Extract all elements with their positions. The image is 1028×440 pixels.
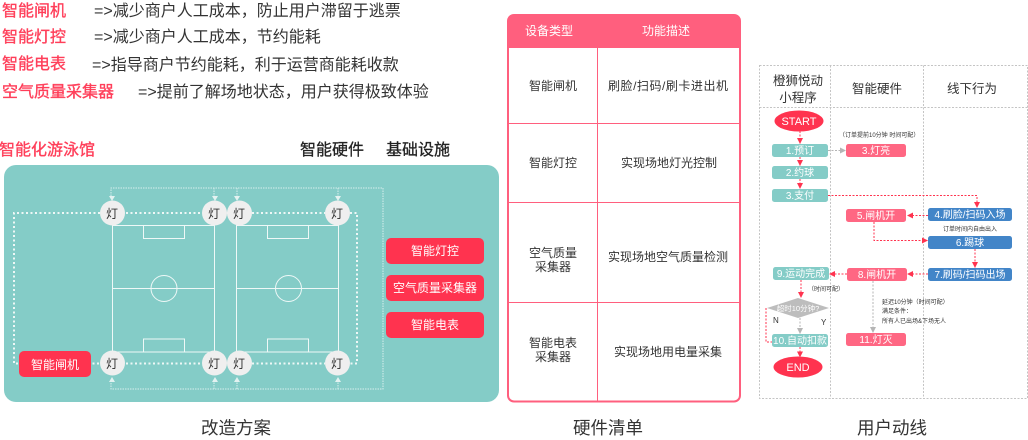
row: smart meter collector: 智能电表 [529, 335, 577, 350]
heading: smart swimming hall: 智能化游泳馆 [0, 141, 95, 159]
light top 3 [227, 200, 252, 226]
button: air quality collector [386, 275, 484, 301]
benefit: smart meter: =>指导商户节约能耗，利于运营商能耗收款 [92, 56, 399, 74]
light top 1 [100, 200, 125, 226]
caption: renovation plan: 改造方案 [201, 418, 271, 438]
light bottom 4: 灯 [331, 357, 343, 371]
end node: END [786, 362, 810, 374]
row: smart gate: 智能闸机 [529, 78, 577, 93]
football field left [112, 226, 214, 352]
light top 2 [202, 200, 227, 226]
thin dotted wiring loop [111, 188, 383, 389]
benefit: air quality collector: 空气质量采集器 [2, 83, 114, 101]
column headers: 线下行为 [947, 82, 997, 96]
football field right [236, 226, 338, 352]
decision diamond [767, 298, 829, 318]
step 1: 1.预订 [786, 145, 814, 157]
flow grid [760, 66, 1028, 398]
benefits list [2, 2, 429, 101]
end node [774, 356, 822, 378]
step 5 gate open: 5.闸机开 [857, 209, 895, 222]
flow annotations: 延迟10分钟（时间可配） [882, 298, 949, 306]
light top 4 [325, 200, 350, 226]
button: smart meter [386, 312, 484, 338]
row: smart lighting [529, 155, 717, 170]
flow annotations [773, 131, 997, 327]
column headers: 小程序 [779, 90, 817, 105]
column headers: 智能硬件 [852, 81, 902, 96]
button: air quality collector: 空气质量采集器 [393, 280, 477, 295]
caption: user flow: 用户动线 [857, 418, 927, 438]
light bottom 2 [202, 350, 227, 376]
row: air quality collector: 采集器 [535, 259, 571, 274]
light top 4: 灯 [331, 207, 343, 221]
column headers: 橙狮悦动 [773, 73, 823, 88]
light bottom 3: 灯 [233, 357, 245, 371]
row: smart meter collector: 采集器 [535, 349, 571, 364]
step 10 auto charge: 10.自动扣款 [773, 334, 827, 347]
benefit: air quality collector [2, 83, 429, 101]
step 11 light off [846, 333, 906, 346]
button: smart lighting: 智能灯控 [411, 243, 459, 258]
panel: hardware list table [508, 15, 740, 402]
wiring arrows [109, 196, 341, 382]
step 4 entry: 4.刷脸/扫码入场 [934, 208, 1006, 221]
row: air quality collector [529, 245, 728, 274]
step 11 light off: 11.灯灭 [859, 334, 893, 346]
benefit: smart gate: 智能闸机 [2, 2, 66, 20]
step 3 light on: 3.灯亮 [862, 144, 890, 157]
step 3 light on [846, 144, 906, 157]
step 2 [772, 166, 828, 179]
heading: infrastructure: 基础设施 [386, 141, 450, 159]
row: air quality collector: 实现场地空气质量检测 [608, 249, 728, 264]
heading: smart hardware: 智能硬件 [300, 141, 364, 159]
lights [100, 200, 350, 376]
row: smart meter collector [529, 335, 722, 364]
benefit: smart gate: =>减少商户人工成本，防止用户滞留于逃票 [94, 2, 401, 20]
light bottom 2: 灯 [208, 357, 220, 371]
panel: user flow chart [760, 66, 1028, 398]
benefit: smart lighting: =>减少商户人工成本，节约能耗 [94, 28, 321, 46]
flow annotations: 所有人已出场&下场无人 [882, 317, 946, 325]
light top 1: 灯 [106, 207, 118, 221]
light bottom 1 [100, 350, 125, 376]
button: smart meter: 智能电表 [411, 317, 459, 332]
button: smart lighting [386, 238, 484, 264]
row: smart gate: 刷脸/扫码/刷卡进出机 [608, 79, 728, 93]
benefit: smart meter [2, 55, 399, 74]
step 7 exit: 7.刷码/扫码出场 [934, 268, 1006, 281]
row: smart lighting: 实现场地灯光控制 [621, 155, 717, 170]
light top 3: 灯 [233, 207, 245, 221]
benefit: smart lighting [2, 28, 321, 46]
start node: START [781, 116, 817, 128]
flow annotations: N [773, 316, 779, 325]
flow arrows grey [800, 150, 873, 334]
row: air quality collector: 空气质量 [529, 245, 577, 260]
step 1 [772, 144, 828, 157]
benefit: smart meter: 智能电表 [2, 55, 66, 73]
table header [508, 15, 740, 48]
start node [774, 110, 824, 132]
step 8 gate open: 8.闸机开 [858, 268, 896, 281]
header labels: 功能描述 [642, 24, 690, 38]
flow annotations: （订单提前10分钟 时间可配） [839, 131, 919, 139]
step 8 gate open [847, 268, 907, 281]
step 3 pay: 3.支付 [786, 189, 814, 202]
button: smart gate: 智能闸机 [31, 357, 79, 372]
light bottom 3 [227, 350, 252, 376]
flow annotations: （时间可配） [808, 285, 844, 293]
step 5 gate open [846, 209, 906, 222]
benefit: air quality collector: =>提前了解场地状态，用户获得极致体验 [138, 83, 429, 101]
header labels: 设备类型 [525, 24, 573, 38]
light bottom 1: 灯 [106, 357, 118, 371]
decision diamond: 超时10分钟? [777, 303, 819, 313]
column headers [773, 73, 997, 105]
caption: hardware list: 硬件清单 [573, 418, 643, 438]
benefit: smart lighting: 智能灯控 [2, 28, 66, 46]
light top 2: 灯 [208, 207, 220, 221]
panel: renovation plan [4, 165, 499, 402]
light bottom 4 [325, 350, 350, 376]
step 2: 2.约球 [786, 166, 814, 179]
step 6 play [928, 236, 1012, 249]
step 3 pay [772, 189, 828, 202]
step 9 complete: 9.运动完成 [777, 267, 825, 280]
button: smart gate [19, 351, 91, 377]
flow annotations: 订单时间内自由出入 [943, 225, 997, 233]
table frame [508, 15, 740, 402]
row: smart gate [529, 78, 728, 93]
header labels [525, 24, 690, 38]
flow arrows red [766, 131, 977, 357]
flow annotations: Y [821, 318, 827, 327]
row: smart meter collector: 实现场地用电量采集 [614, 344, 722, 359]
step 6 play: 6.踢球 [956, 236, 984, 249]
flow annotations: 满足条件： [882, 307, 912, 315]
row: smart lighting: 智能灯控 [529, 155, 577, 170]
thick dotted wiring loop [14, 213, 357, 364]
